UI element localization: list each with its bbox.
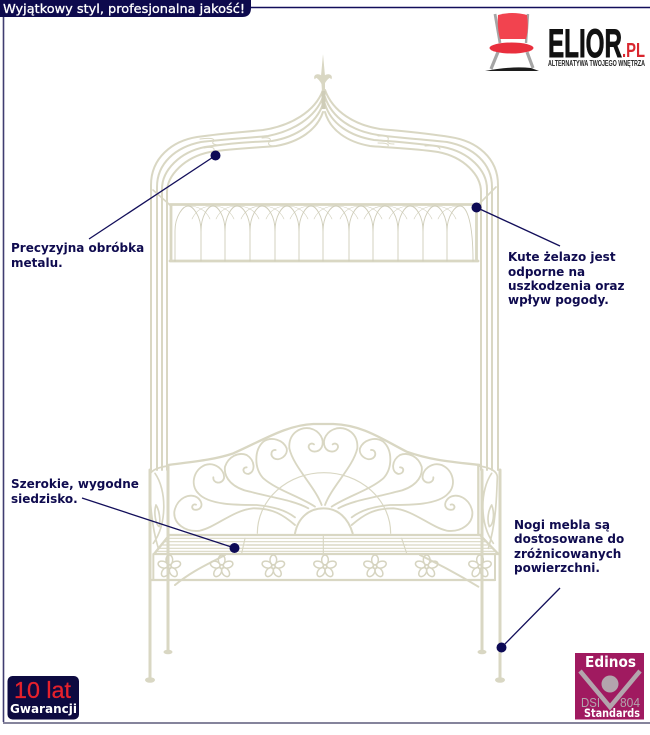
- arch canopy: [151, 90, 498, 470]
- title banner: Wyjątkowy styl, profesjonalna jakość!: [3, 1, 245, 16]
- finial: [315, 54, 331, 109]
- callout: wrought iron: wpływ pogody.: [508, 293, 609, 307]
- callout: wrought iron: odporne na: [508, 265, 585, 279]
- badge: 10 years warranty: 10 lat: [14, 677, 71, 703]
- badge: Edinos standards: DSI: [581, 695, 600, 710]
- callout: wrought iron: [472, 202, 624, 307]
- bench flowers: [157, 555, 492, 578]
- callout: wide seat: Szerokie, wygodne: [11, 477, 139, 491]
- icon: red chair: [485, 13, 539, 71]
- callout: wrought iron: uszkodzenia oraz: [508, 279, 624, 293]
- callout: wide seat: siedzisko.: [11, 492, 78, 506]
- callout: legs: [496, 518, 624, 652]
- callout: legs: zróżnicowanych: [514, 547, 621, 561]
- arch side ties: [153, 187, 496, 205]
- badge: Edinos standards: 804: [620, 695, 640, 710]
- bench backrest scrollwork: [149, 424, 497, 548]
- badge: Edinos standards: Edinos: [585, 653, 636, 671]
- logo: Elior.pl: [485, 13, 645, 71]
- callout: wide seat: [11, 477, 240, 553]
- badge: Edinos standards: Standards: [584, 706, 640, 720]
- badge: 10 years warranty: [8, 676, 79, 720]
- bench arms: [149, 465, 497, 548]
- garden bench with arch: [145, 54, 505, 683]
- legs and posts: [150, 470, 500, 678]
- badge: Edinos standards: [575, 653, 644, 720]
- callout: legs: powierzchni.: [514, 561, 600, 575]
- bench seat: [151, 535, 498, 587]
- callout: wrought iron: Kute żelazo jest: [508, 250, 616, 264]
- leg feet: [145, 650, 505, 683]
- callout: legs: dostosowane do: [514, 532, 624, 546]
- badge: 10 years warranty: Gwarancji: [10, 702, 77, 716]
- callout: metal finishing: metalu.: [11, 256, 63, 270]
- callout: legs: Nogi mebla są: [514, 518, 610, 532]
- callout: metal finishing: Precyzyjna obróbka: [11, 241, 144, 255]
- callout: metal finishing: [11, 150, 220, 270]
- upper panel: [170, 204, 478, 261]
